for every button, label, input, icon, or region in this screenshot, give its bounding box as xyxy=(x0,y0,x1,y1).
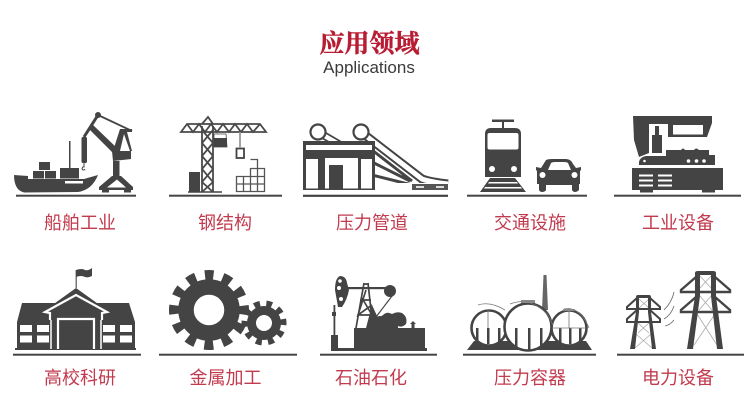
ground line xyxy=(169,195,282,197)
panel: industrial equipment xyxy=(614,116,741,233)
ground line xyxy=(303,195,448,197)
label: 船舶工业 xyxy=(44,213,116,233)
panel: pressure pipeline xyxy=(303,124,448,233)
label: 高校科研 xyxy=(44,368,116,388)
ground line xyxy=(159,354,297,356)
label: 压力容器 xyxy=(494,368,566,388)
icon: spherical tanks xyxy=(467,275,592,350)
panel: transport xyxy=(467,120,587,233)
title: Applications xyxy=(323,58,415,77)
icon: gears xyxy=(174,275,288,347)
title: 应用领域 xyxy=(319,30,420,58)
panel: pressure vessels xyxy=(463,275,596,388)
icon: ship and harbour crane xyxy=(14,112,133,192)
icon: machine tool xyxy=(632,116,723,192)
ground line xyxy=(617,354,744,356)
icon: transmission towers xyxy=(627,271,730,349)
label: 工业设备 xyxy=(642,213,714,233)
icon: pipeline station xyxy=(303,124,448,190)
icon: oil pump jack xyxy=(331,276,427,351)
panel: shipbuilding xyxy=(14,112,136,233)
panel: metal processing xyxy=(159,275,297,388)
label: 石油石化 xyxy=(335,368,407,388)
ground line xyxy=(463,354,596,356)
icon: tram and car xyxy=(480,120,581,192)
icon: tower crane xyxy=(181,117,266,192)
ground line xyxy=(467,195,587,197)
panel: steel structure xyxy=(169,117,282,233)
icon: school building xyxy=(15,268,136,350)
panel: universities xyxy=(13,268,141,388)
label: 交通设施 xyxy=(494,213,566,233)
label: 压力管道 xyxy=(336,213,408,233)
ground line xyxy=(614,195,741,197)
title xyxy=(319,30,420,77)
ground line xyxy=(16,195,136,197)
ground line xyxy=(13,354,141,356)
panel: petrochemical xyxy=(320,276,437,388)
label: 钢结构 xyxy=(198,213,252,233)
label: 电力设备 xyxy=(642,368,714,388)
ground line xyxy=(320,354,437,356)
label: 金属加工 xyxy=(190,368,262,388)
panel: power equipment xyxy=(617,271,744,388)
